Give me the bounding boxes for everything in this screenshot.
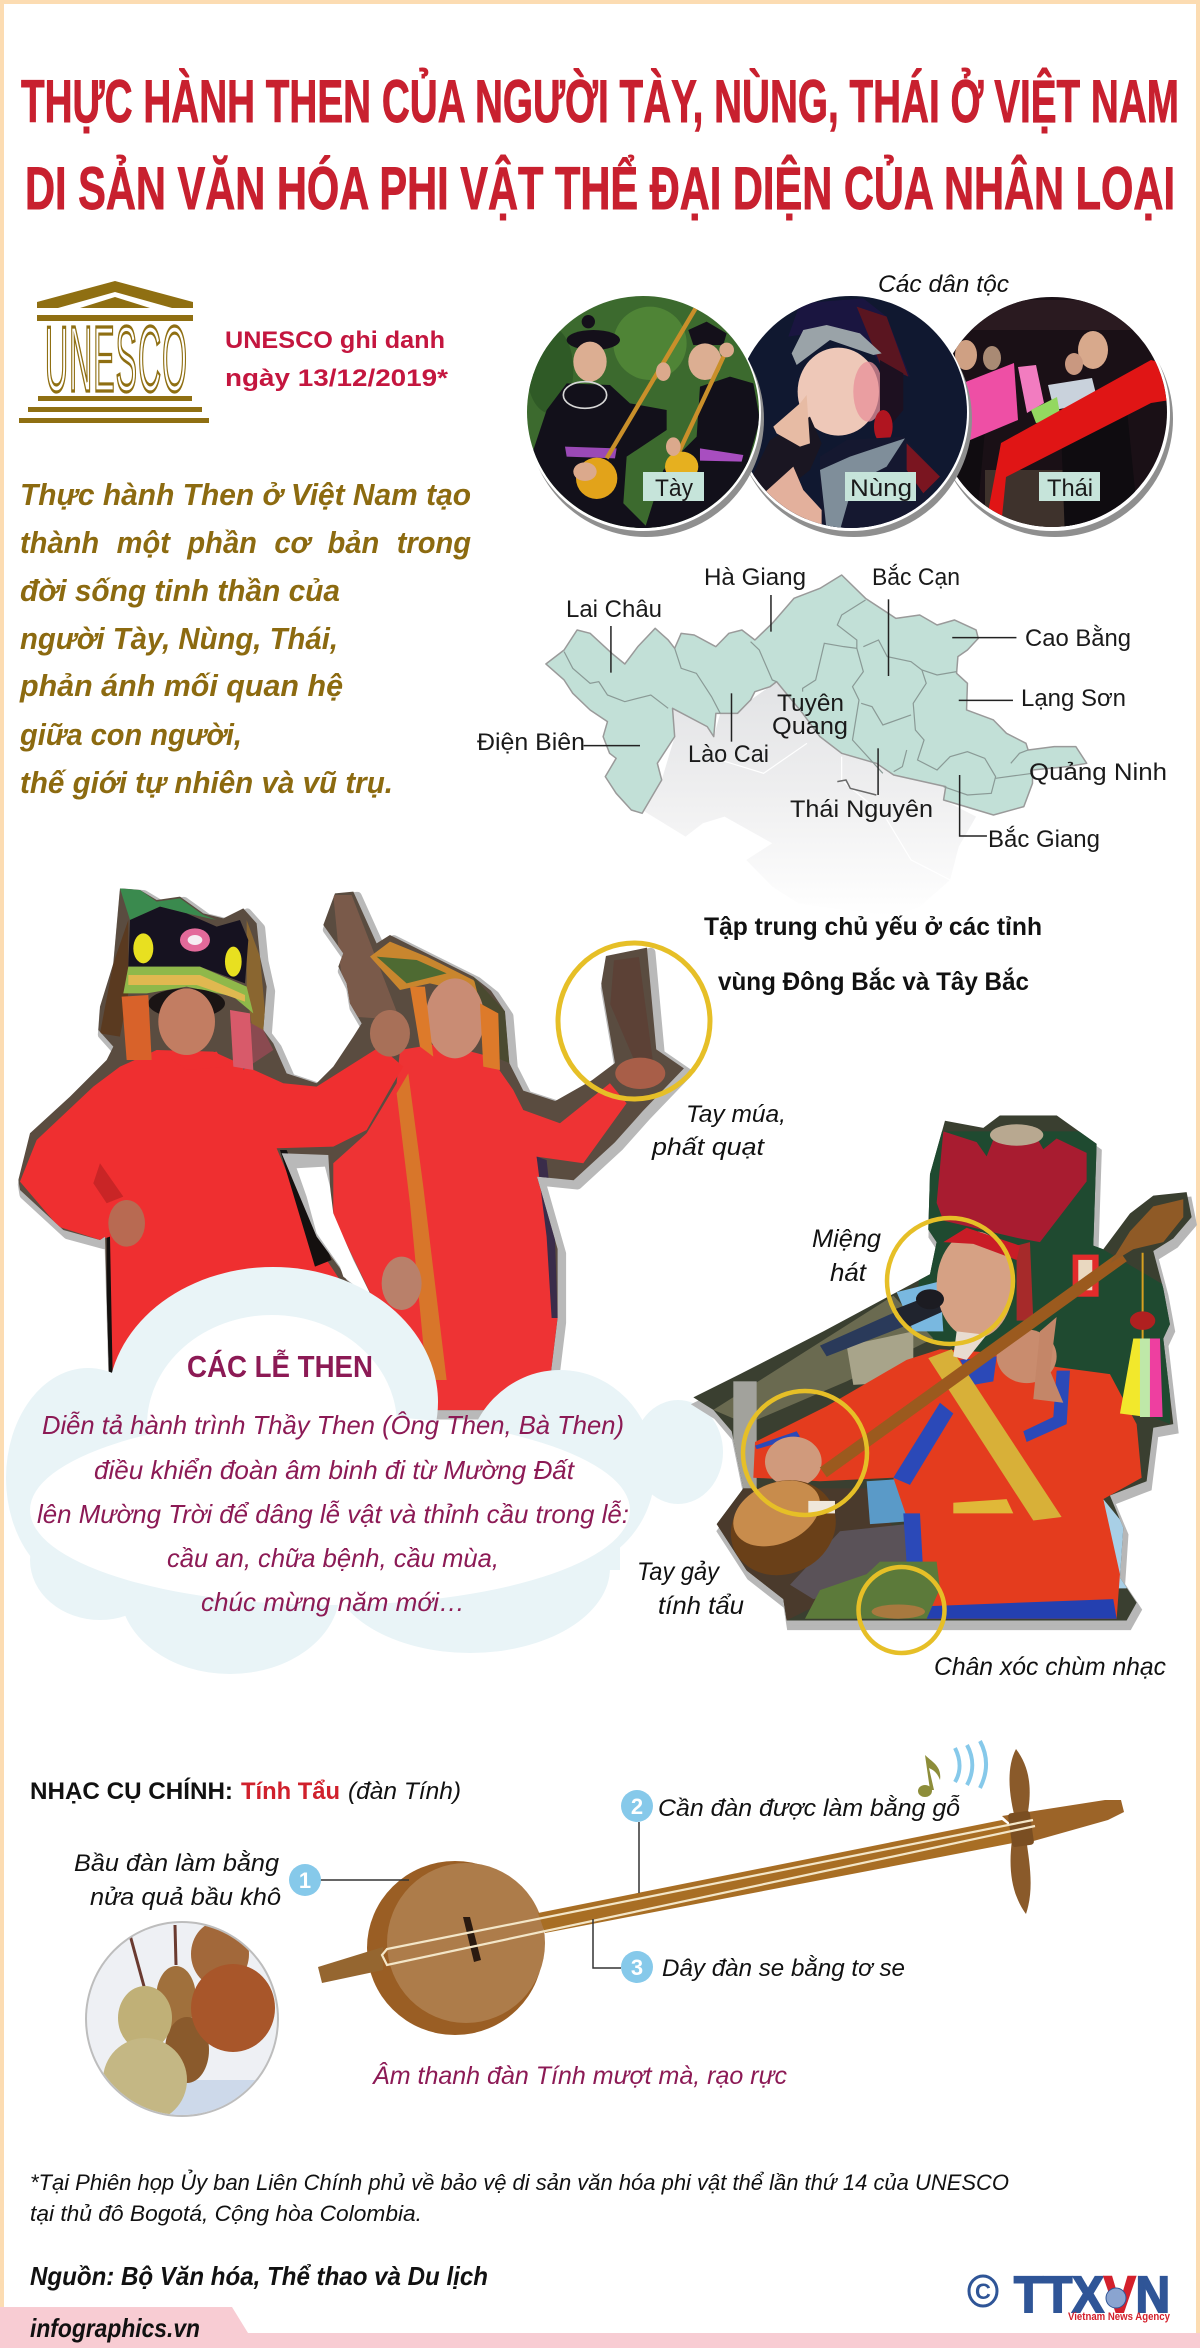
source: Nguồn: Bộ Văn hóa, Thể thao và Du lịch [30,2261,488,2291]
text: rituals description: cầu an, chữa bệnh, cầu mùa, [167,1543,499,1573]
callout 1: gourd body: nửa quả bầu khô [90,1884,281,1911]
rings: singing, plucking, foot rattle [743,1218,1013,1653]
title [21,68,1179,222]
map: northern Vietnam provinces: Lào Cai [688,741,769,768]
text: rituals description: chúc mừng năm mới… [201,1587,465,1617]
map caption [704,913,1042,996]
logo: TTXVN: Vietnam News Agency [1068,2311,1171,2323]
photo: Thái [953,297,1173,537]
logo: TTXVN: TTXVN [1014,2266,1170,2323]
callout 3: silk strings: 3 [631,1955,643,1980]
map: northern Vietnam provinces [477,564,1167,917]
callout 2: wooden neck: 2 [631,1794,643,1819]
UNESCO inscription date: UNESCO ghi danh [225,327,445,354]
heading: rituals: CÁC LỄ THEN [187,1349,373,1384]
icon: music note and sound waves [918,1741,986,1797]
captions: man's actions: tính tẩu [658,1592,744,1620]
ring: fan gesture [558,943,710,1099]
photo: Nùng [748,296,972,537]
ethnic group labels: Tày [655,475,693,502]
captions: man's actions: hát [830,1259,867,1287]
intro paragraph: Thực hành Then ở Việt Nam tạo [20,477,471,512]
callout 2: wooden neck [621,1790,960,1893]
map: northern Vietnam provinces: Cao Bằng [1025,625,1131,652]
map: northern Vietnam provinces: Quảng Ninh [1029,759,1167,786]
callout 1: gourd body: 1 [299,1868,311,1893]
map: northern Vietnam provinces: Lạng Sơn [1021,685,1126,712]
icon: UNESCO logo [19,281,209,423]
intro paragraph: đời sống tinh thần của [20,573,340,608]
intro paragraph: thành một phần cơ bản trong [20,525,471,560]
caption: dancing hand [651,1101,786,1161]
UNESCO inscription date: ngày 13/12/2019* [225,365,449,392]
callout 2: wooden neck: Cần đàn được làm bằng gỗ [658,1794,960,1822]
footnote: tại thủ đô Bogotá, Cộng hòa Colombia. [30,2201,422,2226]
cloud panel: Then rituals [6,1267,723,1674]
callout 3: silk strings: Dây đàn se bằng tơ se [662,1955,905,1982]
callout 3: silk strings [593,1919,905,1983]
ethnic groups heading: Các dân tộc [878,271,1009,298]
footnote: *Tại Phiên họp Ủy ban Liên Chính phủ về bảo vệ di sản văn hóa phi vật thể lần thứ 14 của UNESCO [30,2169,1009,2195]
footer band: infographics.vn [30,2313,200,2343]
UNESCO inscription date [225,327,449,392]
caption: dancing hand: phất quạt [651,1134,765,1161]
caption: dancing hand: Tay múa, [686,1101,786,1128]
map: northern Vietnam provinces: Hà Giang [704,564,806,591]
text: rituals description: điều khiển đoàn âm binh đi từ Mường Đất [94,1455,576,1485]
footer band [0,2307,1200,2348]
heading: main instrument: NHẠC CỤ CHÍNH: [30,1777,233,1805]
map: northern Vietnam provinces: Tuyên [777,690,844,717]
icon: UNESCO logo: UNESCO [45,307,187,411]
text: rituals description [37,1410,629,1617]
captions: man's actions: Chân xóc chùm nhạc [934,1653,1166,1681]
intro paragraph [19,477,471,800]
map: northern Vietnam provinces: Bắc Giang [988,826,1100,853]
photo: Then master playing tính tẩu [691,1115,1197,1630]
heading: instrument note: (đàn Tính) [348,1778,461,1805]
photo: dried gourds [85,1921,279,2117]
intro paragraph: giữa con người, [19,717,242,752]
callout 1: gourd body: Bầu đàn làm bằng [74,1850,280,1877]
map caption: Tập trung chủ yếu ở các tỉnh [704,913,1042,941]
logo: TTXVN: C [975,2279,991,2304]
ethnic group labels [643,472,1100,502]
text: rituals description: lên Mường Trời để dâng lễ vật và thỉnh cầu trong lễ: [37,1499,629,1529]
map caption: vùng Đông Bắc và Tây Bắc [718,966,1029,996]
captions: man's actions: Miệng [812,1225,881,1253]
map: northern Vietnam provinces: Quang [772,713,848,740]
ethnic group labels: Nùng [850,475,912,502]
heading: instrument name: Tính Tẩu [241,1778,340,1805]
intro paragraph: người Tày, Nùng, Thái, [20,621,338,656]
captions: man's actions: Tay gảy [637,1558,720,1586]
photo: Tày [520,290,770,540]
intro paragraph: thế giới tự nhiên và vũ trụ. [20,765,393,800]
instrument: tính tẩu lute [318,1749,1124,2035]
ethnic group labels: Thái [1047,475,1093,502]
tagline: sound of the đàn tính: Âm thanh đàn Tính mượt mà, rạo rực [371,2061,787,2090]
captions: man's actions [637,1225,1166,1681]
map: northern Vietnam provinces: Lai Châu [566,596,662,623]
photo: two Then women [0,870,700,1420]
intro paragraph: phản ánh mối quan hệ [19,668,343,703]
callout 1: gourd body [74,1850,409,1911]
map: northern Vietnam provinces: Bắc Cạn [872,564,960,591]
map: northern Vietnam provinces: Điện Biên [477,729,585,756]
text: rituals description: Diễn tả hành trình Thầy Then (Ông Then, Bà Then) [42,1410,624,1440]
footnote [30,2169,1009,2226]
map: northern Vietnam provinces: Thái Nguyên [790,796,933,823]
